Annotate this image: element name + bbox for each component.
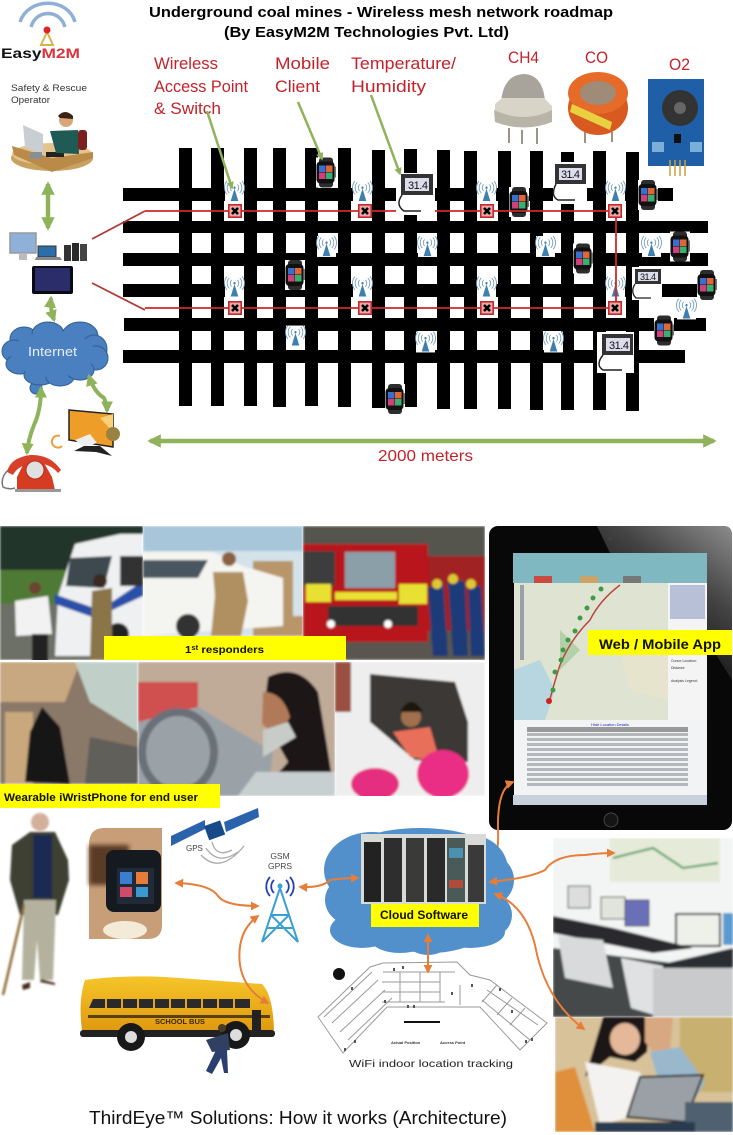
white gaps in grid: [639, 201, 709, 318]
icon: temperature sensor 3: [632, 267, 662, 300]
figure: school child: [206, 1024, 230, 1074]
logo: EasyM2M: Easy M2M: [1, 46, 80, 61]
figure: old man with cane: [3, 813, 69, 995]
logo: EasyM2M: [1, 3, 80, 61]
title: (By EasyM2M Technologies Pvt. Ltd): [224, 25, 509, 41]
labels: device legend: [154, 48, 690, 118]
labels: device legend: CH4: [508, 48, 539, 67]
arrow: tower to bus: [239, 916, 268, 1003]
diagram: WiFi indoor floor plan: Actual Position: [391, 1040, 421, 1045]
photo: ambulance: [0, 526, 143, 662]
icon: temperature sensor 1: [396, 173, 435, 215]
arrow: tablet to internet: [51, 298, 54, 320]
labels: device legend: Humidity: [351, 77, 427, 96]
arrow: 2000 meters span: [150, 439, 714, 443]
arrow: internet to monitor: [89, 376, 107, 411]
label: 1st responders: responders: [198, 644, 264, 656]
table: [514, 720, 707, 795]
device: tablet web app: Hide Location Details: [591, 722, 629, 727]
icons: switches: [229, 205, 621, 314]
label: 1st responders: [104, 636, 346, 660]
icon: O2 sensor board: [648, 79, 704, 176]
labels: device legend: O2: [669, 55, 690, 74]
labels: device legend: & Switch: [154, 99, 221, 118]
arrow: tower to racks: [300, 878, 358, 887]
arrow: operator to computers: [46, 184, 50, 228]
arrow: cloud to couple: [495, 894, 584, 1029]
text: Safety & Rescue Operator: [11, 83, 87, 106]
icon: computers: [10, 233, 87, 261]
label: WiFi indoor location tracking: WiFi indoor location tracking: [349, 1058, 513, 1070]
labels: device legend: Temperature/: [351, 54, 456, 73]
network line: uplinks: [92, 211, 145, 310]
icon: GSM GPRS tower: [262, 851, 298, 942]
device: tablet web app: [489, 526, 732, 830]
photo: woman in pink car: [335, 662, 485, 800]
diagram: WiFi indoor floor plan: [318, 962, 547, 1053]
network line: backbone: [145, 211, 616, 308]
label: 1st responders: st: [191, 645, 199, 652]
icons: wireless access points: [225, 181, 696, 352]
label: Web / Mobile App: [588, 630, 732, 655]
icon: GPS satellite: GPS: [186, 844, 203, 853]
panel: internet cloud: Internet: [28, 344, 77, 359]
arrows: legend pointers: [207, 95, 400, 188]
icon: school bus: SCHOOL BUS: [155, 1017, 205, 1026]
server racks: [361, 834, 486, 904]
diagram: WiFi indoor floor plan: Access Point: [440, 1040, 466, 1045]
label: 1st responders: 1: [185, 644, 191, 656]
arrow: tablet to cloud: [494, 782, 513, 864]
text: Safety & Rescue Operator: Operator: [11, 95, 50, 106]
icon: temperature sensor 2: [553, 162, 587, 204]
title: Underground coal mines - Wireless mesh network roadmap: [149, 5, 613, 21]
device: tablet web app: Analysis Legend:: [671, 679, 698, 683]
photo: couple with laptop: [555, 1017, 733, 1132]
labels: device legend: Access Point: [154, 77, 248, 96]
device: tablet web app: Cursor Location:: [671, 659, 697, 663]
icon: school bus: [80, 976, 275, 1051]
labels: device legend: Mobile: [275, 54, 330, 73]
photo: control room: [553, 838, 733, 1017]
caption: ThirdEye Solutions: ThirdEye™ Solutions: How it works (Architecture): [89, 1107, 507, 1128]
device: tablet web app: Distance: [671, 666, 685, 670]
icon: temperature sensor 3: 31.4: [640, 272, 656, 282]
text: Safety & Rescue Operator: Safety & Rescue: [11, 83, 87, 94]
icon: temperature sensor 4: [597, 332, 634, 373]
chart: mine tunnel grid: [123, 148, 708, 411]
arrow: watch to tower: [176, 883, 258, 906]
label: wearable iWristPhone: Wearable iWristPhone for end user: [4, 792, 199, 804]
photo: police: [143, 526, 303, 638]
icon: monitor: [52, 410, 120, 456]
screen header: [513, 553, 707, 583]
label: Web / Mobile App: Web / Mobile App: [599, 637, 721, 652]
label: wearable iWristPhone: [0, 784, 220, 808]
icon: GPS satellite: [171, 808, 259, 863]
side panel: [668, 583, 707, 720]
labels: device legend: Wireless: [154, 54, 218, 73]
photo: woman on phone: [138, 662, 335, 796]
arrow: cloud to control room map: [490, 853, 614, 882]
icon: red telephone: [2, 455, 61, 492]
icons: mobile client watches: [285, 158, 717, 414]
photo: woman in car 1: [0, 662, 138, 784]
card: watch photo: [80, 818, 172, 948]
icon: CO sensor: [568, 72, 628, 143]
icon: GSM GPRS tower: GSM: [270, 851, 290, 861]
photo: fire engine: [303, 526, 485, 660]
icon: temperature sensor 1: 31.4: [408, 180, 428, 192]
arrow: internet to phone: [27, 388, 41, 453]
icon: temperature sensor 2: 31.4: [561, 169, 580, 181]
arrow: cloud to floor plan: [427, 935, 429, 972]
icon: GSM GPRS tower: GPRS: [268, 861, 292, 871]
panel: cloud software: [324, 828, 514, 955]
icon: temperature sensor 4: 31.4: [609, 340, 629, 352]
icon: CH4 sensor: [494, 74, 552, 144]
labels: device legend: Client: [275, 77, 320, 96]
icon: operator at desk: [11, 112, 93, 172]
title: [149, 5, 613, 41]
icon: tablet: [32, 266, 73, 294]
panel: cloud software: Cloud Software: [380, 910, 468, 922]
panel: internet cloud: [2, 322, 108, 394]
labels: device legend: CO: [585, 48, 608, 67]
map: [514, 583, 668, 720]
label: 2000 meters: 2000 meters: [378, 448, 473, 465]
